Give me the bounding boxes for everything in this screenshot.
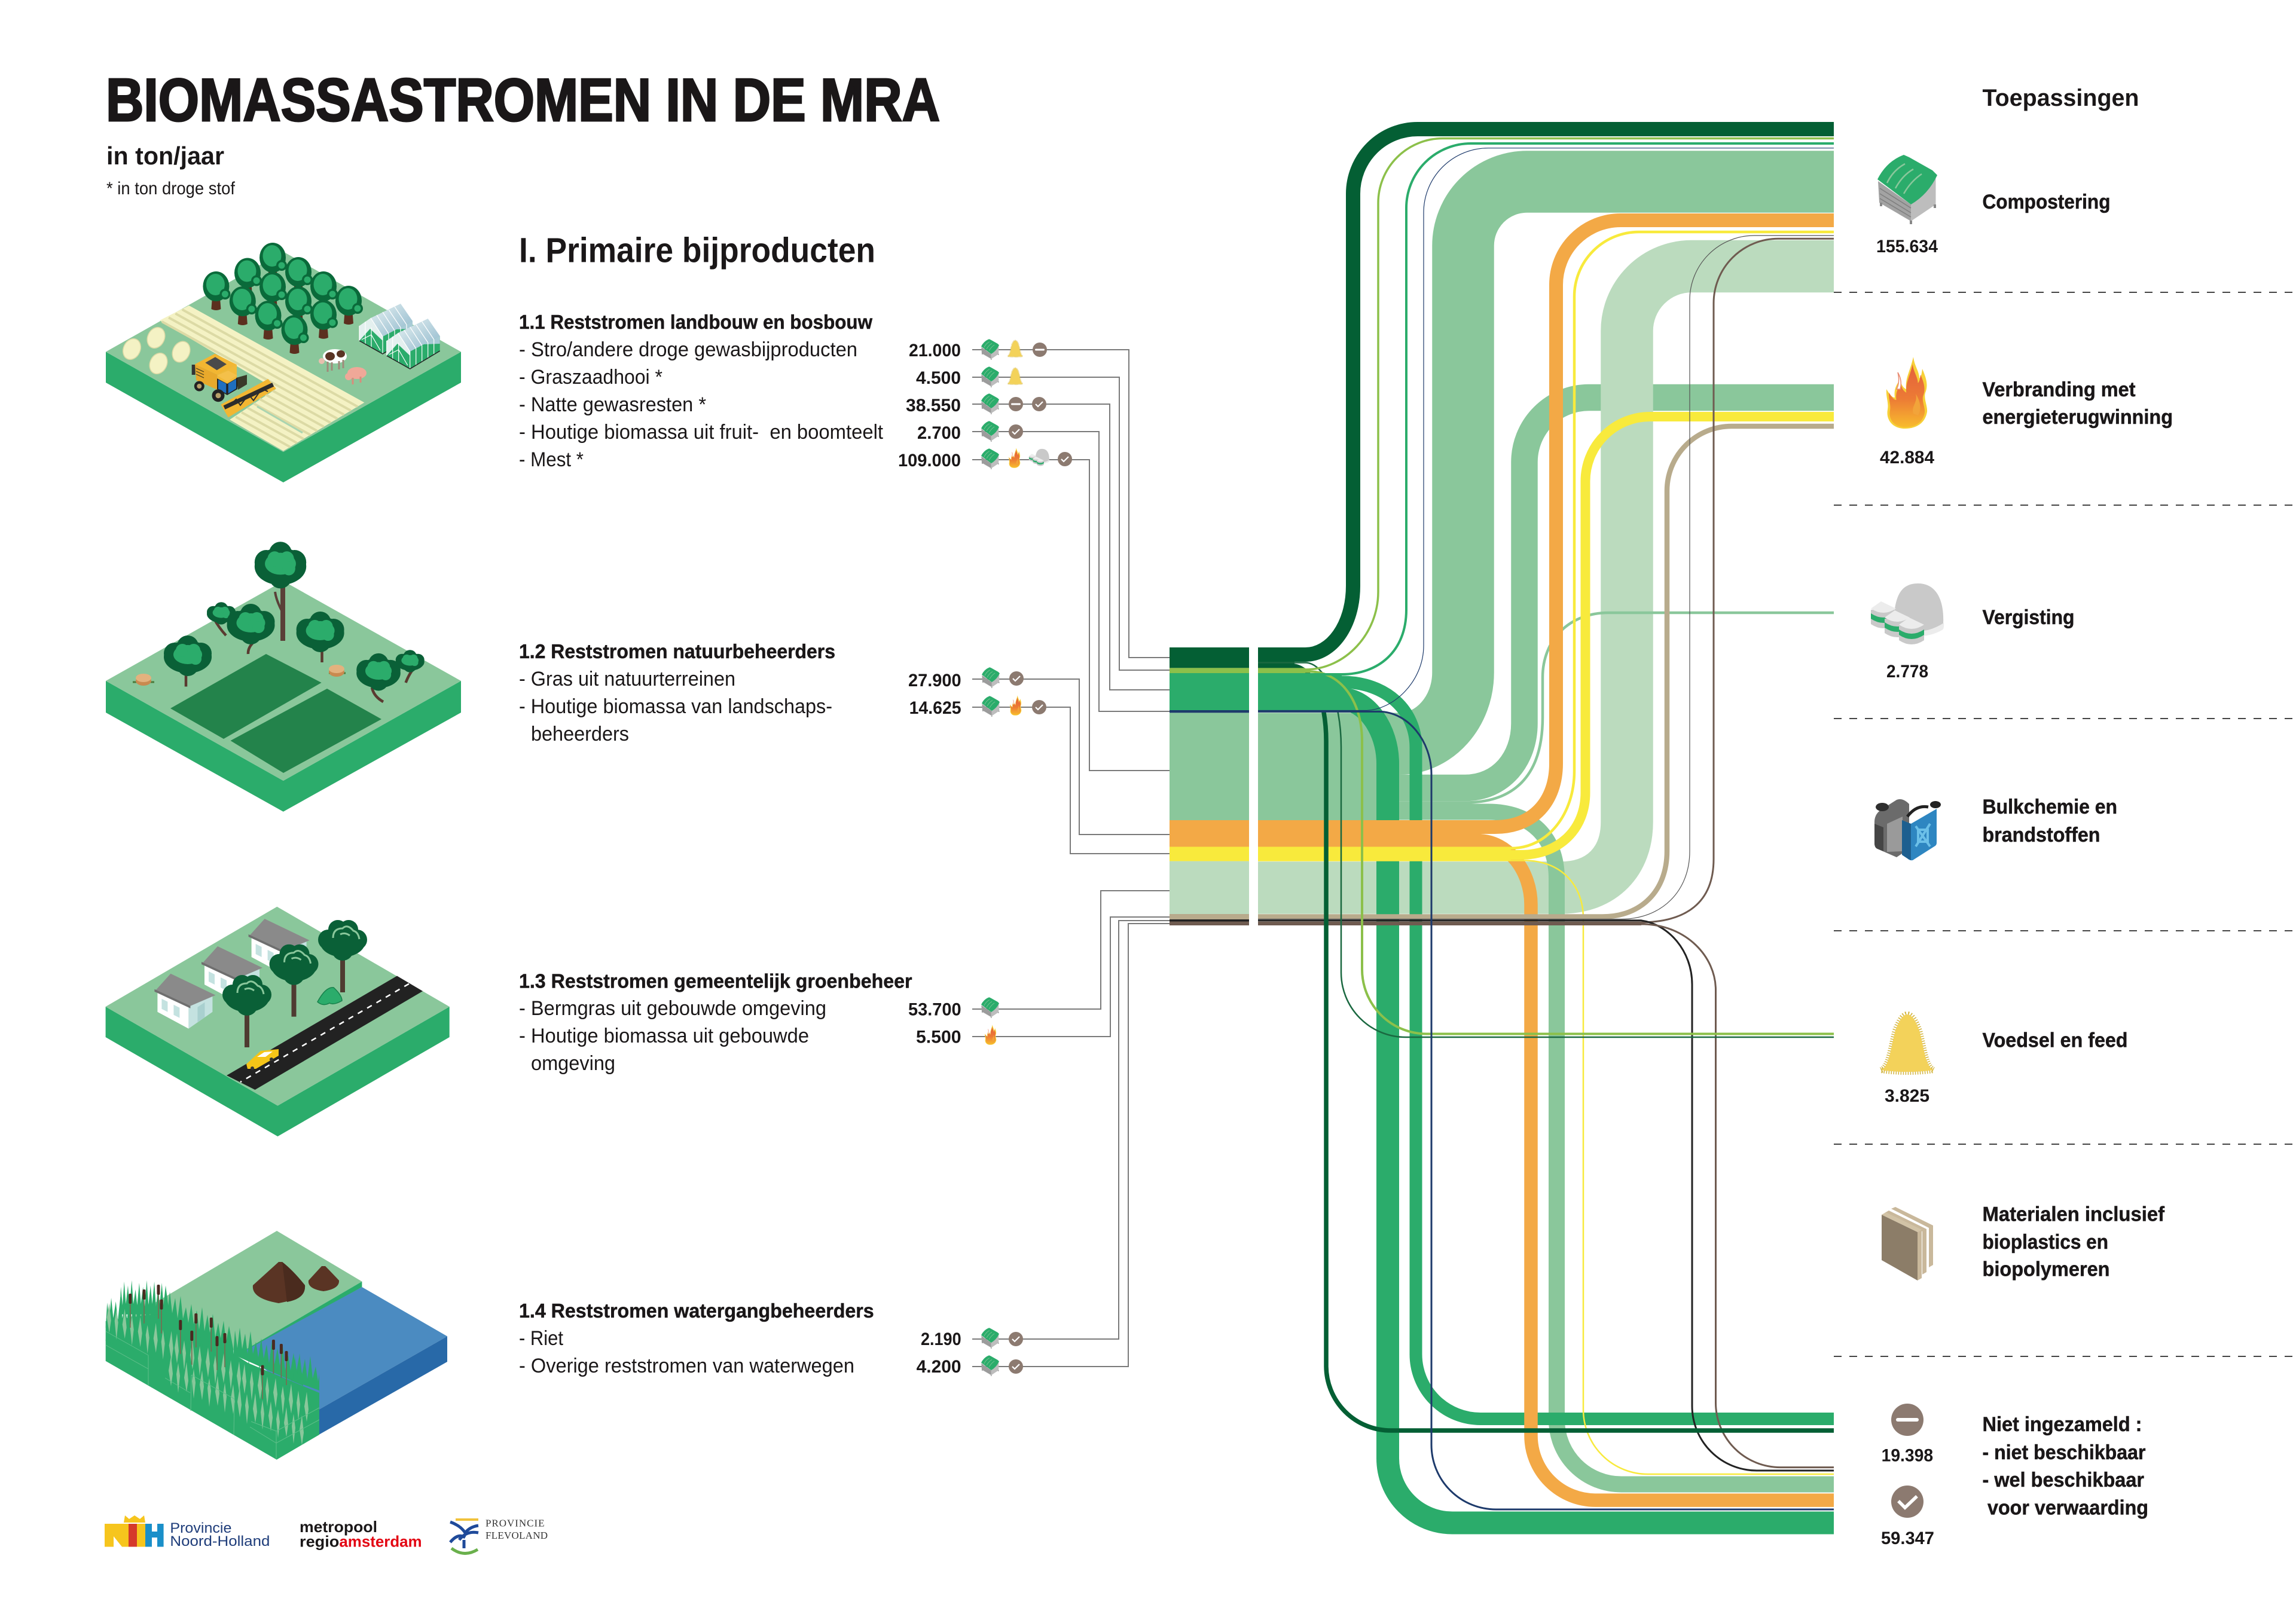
flow: orange to wel beschikbaar: [1258, 840, 1834, 1500]
application: niet ingezameld: - niet beschikbaar: [1983, 1441, 2145, 1464]
text block: 1.2 nature managers: - Gras uit natuurterreinen: [519, 668, 735, 690]
flow: dark green to voedsel en feed: [1258, 662, 1834, 1037]
logo: metropool regio amsterdam: [300, 1518, 422, 1551]
flow: yellow thin to compostering: [1258, 232, 1834, 848]
text block: 1.2 nature managers: 27.900: [908, 671, 961, 690]
logo: Provincie Flevoland: FLEVOLAND: [486, 1530, 548, 1541]
flow: yellow base band: [1258, 846, 1511, 861]
flow: medium green to wel beschikbaar: [1258, 699, 1834, 1523]
text block: 1.4 waterway managers: 1.4 Reststromen watergangbeheerders: [519, 1300, 874, 1322]
flow: brown base band: [1258, 921, 1641, 925]
dashed row dividers: [1834, 292, 2296, 1356]
text block: 1.1 agriculture and forestry: 2.700: [917, 423, 961, 443]
flow: light green base band: [1258, 668, 1305, 673]
application: compostering: 155.634: [1876, 237, 1938, 256]
flow: pale green to compostering: [1258, 267, 1834, 888]
application: bulkchemie: [1874, 796, 2117, 860]
application: voedsel en feed: [1881, 1014, 2127, 1106]
flow: navy to compostering: [1258, 148, 1834, 710]
flow: light green to voedsel en feed: [1258, 672, 1834, 1034]
text block: 1.1 agriculture and forestry: - Mest *: [519, 448, 584, 471]
application: vergisting: [1871, 583, 2075, 681]
text block: 1.1 agriculture and forestry: - Houtige biomassa uit fruit- en boomteelt: [519, 421, 884, 444]
flow: medium green to compostering: [1258, 143, 1834, 674]
icon: jerry cans: [1874, 799, 1941, 860]
application: niet ingezameld: Niet ingezameld :: [1983, 1413, 2142, 1436]
text block: 1.3 municipal green: - Bermgras uit gebouwde omgeving: [519, 997, 826, 1020]
text block: 1.3 municipal green: omgeving: [531, 1052, 615, 1075]
flow: yellow to verbranding: [1258, 417, 1834, 855]
text block: 1.2 nature managers: 1.2 Reststromen natuurbeheerders: [519, 640, 835, 662]
application: vergisting: 2.778: [1886, 662, 1928, 681]
application: vergisting: Vergisting: [1983, 606, 2075, 629]
text block: 1.4 waterway managers: 2.190: [921, 1329, 961, 1349]
application: voedsel en feed: 3.825: [1885, 1086, 1929, 1106]
text block: 1.1 agriculture and forestry: - Natte gewasresten *: [519, 393, 706, 416]
text block: 1.3 municipal green: [519, 970, 961, 1075]
flow: navy to wel beschikbaar: [1258, 711, 1834, 1509]
illustration: nature management scene: [106, 542, 461, 812]
icon: digester: [1871, 583, 1944, 644]
logo: metropool regio amsterdam: regio: [300, 1533, 339, 1551]
application: compostering: Compostering: [1983, 191, 2111, 213]
text block: 1.1 agriculture and forestry: 38.550: [906, 396, 961, 415]
text block: 1.2 nature managers: [519, 640, 961, 745]
flow: grey thin to compostering: [1258, 236, 1834, 919]
flow: brown to compostering: [1258, 239, 1834, 922]
flow: dark green base band: [1258, 647, 1294, 668]
icon: check circle: [1891, 1486, 1923, 1518]
flow: brown to niet beschikbaar: [1258, 924, 1834, 1468]
flow: dark green to niet beschikbaar: [1258, 666, 1834, 1431]
application: verbranding: [1880, 357, 2173, 467]
flow: grass base band: [1258, 713, 1399, 820]
application: niet ingezameld: [1881, 1404, 2148, 1548]
icon: boards: [1882, 1207, 1933, 1280]
text block: 1.4 waterway managers: - Riet: [519, 1327, 564, 1350]
flow: grass to vergisting: [1258, 613, 1834, 802]
logo: Provincie Flevoland: PROVINCIE: [486, 1517, 544, 1529]
text block: 1.1 agriculture and forestry: 21.000: [909, 341, 961, 360]
application: bulkchemie: Bulkchemie en: [1983, 796, 2117, 818]
application: verbranding: energieterugwinning: [1983, 406, 2173, 429]
flow: medium green base band: [1258, 673, 1342, 710]
application: niet ingezameld: 59.347: [1881, 1529, 1934, 1548]
icon: haystack: [1881, 1014, 1934, 1072]
row icons: 1.2: [982, 667, 1046, 717]
text block: 1.3 municipal green: 53.700: [908, 1000, 961, 1020]
application: verbranding: Verbranding met: [1983, 378, 2136, 401]
logo: Provincie Noord-Holland: Noord-Holland: [170, 1533, 270, 1549]
central source bar: [1170, 647, 1249, 925]
subtitle: unit: in ton/jaar: [106, 142, 224, 170]
application: bulkchemie: brandstoffen: [1983, 824, 2100, 846]
logo: Provincie Noord-Holland: Provincie: [170, 1520, 231, 1536]
application: materialen: [1882, 1203, 2165, 1280]
flow: yellow to wel beschikbaar: [1258, 861, 1834, 1474]
title: BIOMASSASTROMEN IN DE MRA: [106, 67, 940, 134]
flow: grass to wel beschikbaar: [1258, 812, 1834, 1484]
sankey flows: [1258, 129, 1834, 1523]
illustration: waterway scene: [106, 1231, 447, 1460]
illustration: municipal green scene: [106, 907, 450, 1136]
text block: 1.4 waterway managers: - Overige reststromen van waterwegen: [519, 1355, 854, 1377]
text block: 1.1 agriculture and forestry: - Stro/andere droge gewasbijproducten: [519, 338, 857, 361]
row icons: 1.4: [981, 1328, 1023, 1376]
text block: 1.3 municipal green: - Houtige biomassa uit gebouwde: [519, 1025, 809, 1047]
text block: 1.4 waterway managers: [519, 1300, 961, 1377]
text block: 1.1 agriculture and forestry: 1.1 Reststromen landbouw en bosbouw: [519, 311, 872, 333]
illustration: agriculture scene: [106, 243, 461, 482]
application: niet ingezameld: 19.398: [1882, 1445, 1933, 1466]
text block: 1.4 waterway managers: 4.200: [917, 1357, 961, 1377]
application: materialen: biopolymeren: [1983, 1258, 2109, 1280]
row icons: 1.3: [981, 997, 999, 1045]
text block: 1.1 agriculture and forestry: 109.000: [898, 451, 961, 470]
application: compostering: [1876, 155, 2111, 256]
flow: medium green to niet beschikbaar: [1258, 682, 1834, 1419]
text block: 1.3 municipal green: 1.3 Reststromen gemeentelijk groenbeheer: [519, 970, 912, 992]
application: niet ingezameld: - wel beschikbaar: [1983, 1469, 2144, 1491]
application: niet ingezameld: voor verwaarding: [1987, 1497, 2148, 1520]
flow: black to niet beschikbaar: [1258, 921, 1834, 1471]
logo: Provincie Noord-Holland: [105, 1515, 270, 1549]
text block: 1.1 agriculture and forestry: 4.500: [916, 368, 961, 388]
icon: flame: [1886, 357, 1927, 429]
section heading: primary by-products: I. Primaire bijproducten: [519, 231, 875, 270]
text block: 1.2 nature managers: beheerders: [531, 723, 629, 745]
text block: 1.3 municipal green: 5.500: [916, 1027, 961, 1047]
application: materialen: Materialen inclusief: [1983, 1203, 2165, 1225]
heading: applications: Toepassingen: [1983, 85, 2139, 111]
flow: light green to compostering: [1258, 139, 1834, 670]
footnote: dry matter: * in ton droge stof: [106, 179, 236, 198]
text block: 1.2 nature managers: 14.625: [909, 698, 961, 718]
text block: 1.1 agriculture and forestry: [519, 311, 961, 471]
row icons: 1.1: [981, 339, 1072, 469]
application: voedsel en feed: Voedsel en feed: [1983, 1029, 2127, 1052]
application: materialen: bioplastics en: [1983, 1231, 2108, 1254]
logo: metropool regio amsterdam: amsterdam: [339, 1533, 422, 1551]
flow: grass to verbranding: [1258, 398, 1834, 788]
icon: compost bin: [1877, 155, 1937, 224]
connector lines from sources to central bar: [972, 350, 1170, 1367]
flow: grass to compostering: [1258, 182, 1834, 744]
text block: 1.1 agriculture and forestry: - Graszaadhooi *: [519, 366, 662, 389]
application: verbranding: 42.884: [1880, 448, 1934, 467]
logo: Provincie Flevoland: [450, 1517, 548, 1554]
flow: orange to compostering: [1258, 220, 1834, 827]
text block: 1.2 nature managers: - Houtige biomassa van landschaps-: [519, 695, 832, 718]
icon: minus circle: [1891, 1404, 1923, 1436]
logo: metropool regio amsterdam: metropool: [300, 1518, 377, 1536]
flow: dark green to compostering: [1258, 129, 1834, 655]
flow: tan to verbranding: [1258, 426, 1834, 917]
